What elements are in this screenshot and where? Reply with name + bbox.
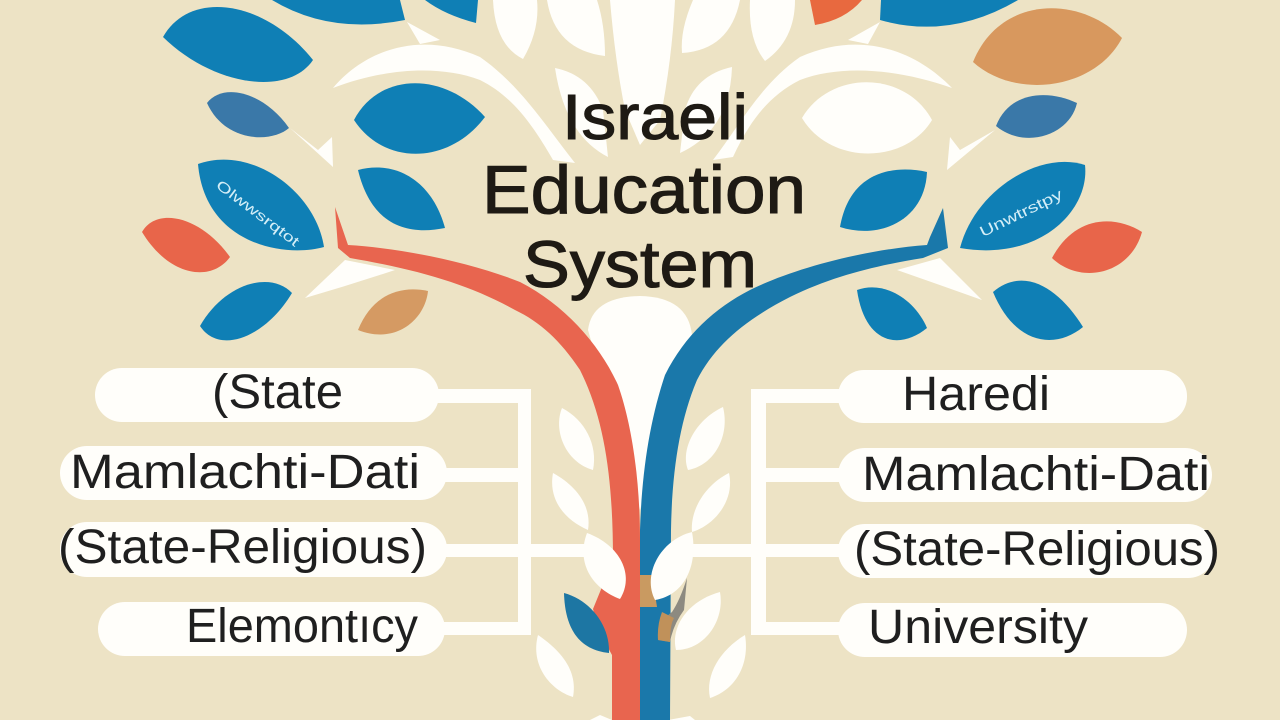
pill: Elementary: Elemontıcy bbox=[186, 600, 418, 653]
pill: Haredi: Haredi bbox=[902, 368, 1050, 421]
tan patch where the trunks join bbox=[640, 575, 687, 642]
pill: State-Religious left: (State-Religious) bbox=[58, 521, 427, 574]
pill: University bbox=[838, 601, 1187, 657]
white trunk bulb between branches bbox=[588, 296, 692, 510]
leaf with label: left bbox=[198, 160, 324, 250]
title: Israeli bbox=[562, 81, 748, 153]
large white leaves at the trunk fork bbox=[583, 532, 693, 600]
leaf with label: right bbox=[960, 162, 1085, 250]
pill: Mamlachti-Dati left: Mamlachti-Dati bbox=[70, 446, 420, 499]
pill: Mamlachti-Dati right: Mamlachti-Dati bbox=[862, 448, 1210, 501]
pill: Elementary bbox=[98, 600, 445, 656]
pill: State-Religious right: (State-Religious) bbox=[854, 523, 1220, 576]
pill: University: University bbox=[868, 601, 1088, 654]
pill: State: (State bbox=[212, 366, 343, 419]
leaf with label: left: Olwwsrqtot bbox=[213, 177, 303, 250]
white tree canopy: leaves and branches behind the title bbox=[333, 0, 952, 163]
title: Education bbox=[482, 152, 806, 228]
small white leaves along the trunk bbox=[536, 407, 746, 720]
leaf with label: right: Unwtrstpy bbox=[977, 186, 1066, 241]
blue branch and trunk bbox=[640, 208, 948, 720]
leaves: right side bbox=[810, 0, 1142, 340]
small white branch accents bbox=[290, 128, 995, 300]
leaves: left side bbox=[142, 0, 485, 340]
title: System bbox=[523, 227, 757, 301]
dark teal leaf beside the trunk bbox=[564, 593, 609, 653]
connector lines: right bbox=[685, 389, 846, 635]
pill: Haredi bbox=[838, 368, 1187, 423]
pill: State bbox=[95, 366, 439, 422]
red branch and trunk bbox=[335, 207, 640, 720]
title bbox=[482, 81, 806, 301]
connector lines: left bbox=[430, 389, 595, 635]
